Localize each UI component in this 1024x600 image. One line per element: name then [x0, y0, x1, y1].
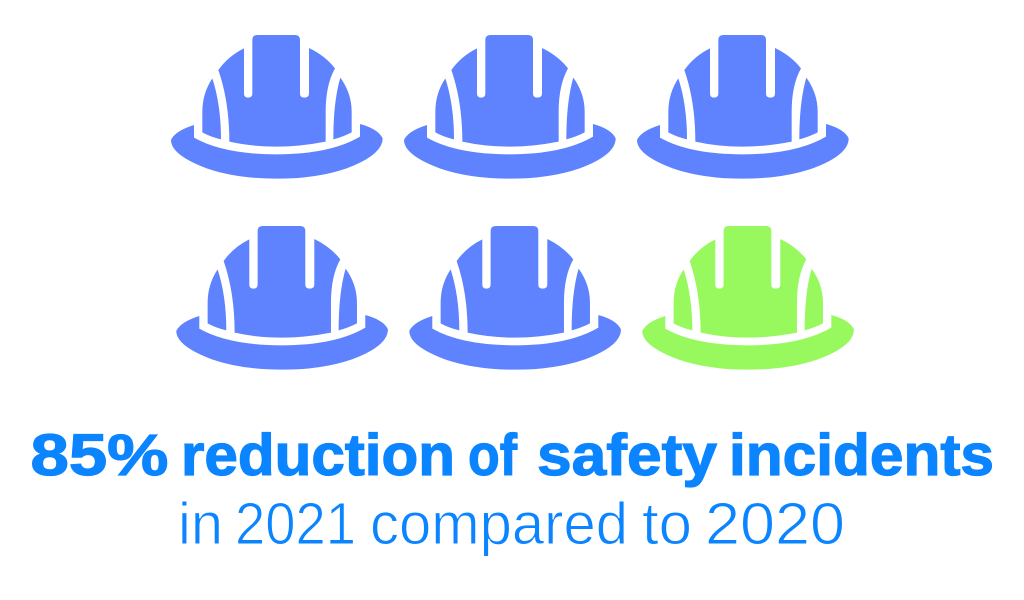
subheading: in 2021 compared to 2020 — [178, 491, 845, 557]
icon: blue hard hat 4 — [176, 226, 388, 370]
subheading: in 2021 compared to 2020: to — [642, 491, 692, 557]
icon: blue hard hat 1 — [171, 35, 383, 179]
heading: 85% reduction of safety incidents: of — [468, 423, 518, 488]
heading: 85% reduction of safety incidents: incidents — [729, 423, 994, 488]
heading: 85% reduction of safety incidents: reduction — [181, 423, 455, 488]
icon: green hard hat — [642, 226, 854, 370]
heading: 85% reduction of safety incidents — [30, 423, 994, 488]
heading: 85% reduction of safety incidents: 85% — [30, 423, 168, 488]
subheading: in 2021 compared to 2020: 2021 — [235, 491, 356, 557]
subheading: in 2021 compared to 2020: 2020 — [705, 491, 845, 557]
subheading: in 2021 compared to 2020: compared — [370, 491, 628, 557]
icon: blue hard hat 5 — [409, 226, 621, 370]
icon: blue hard hat 2 — [404, 35, 616, 179]
subheading: in 2021 compared to 2020: in — [178, 491, 223, 557]
icon: blue hard hat 3 — [637, 35, 849, 179]
heading: 85% reduction of safety incidents: safety — [537, 423, 717, 488]
